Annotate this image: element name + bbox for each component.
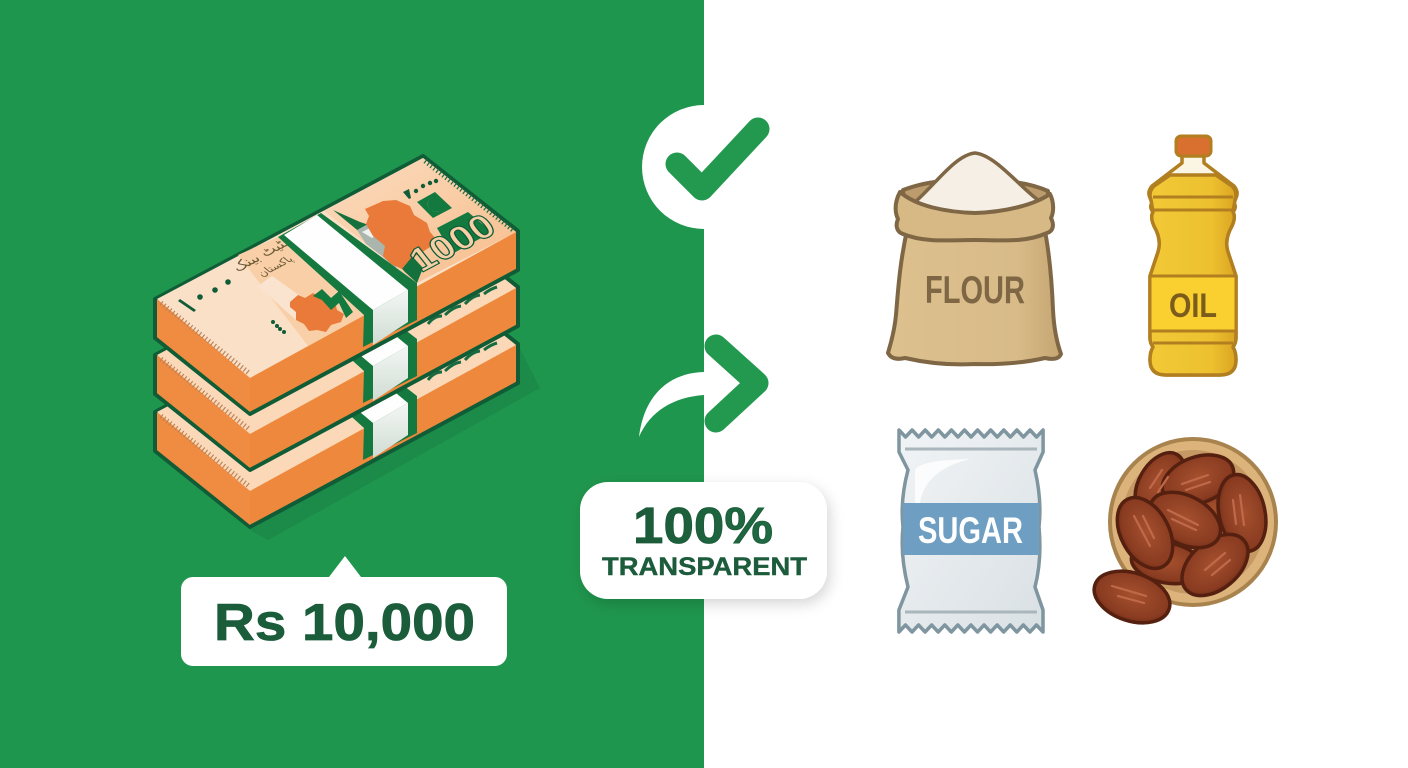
note face: right half: 1000: [401, 207, 503, 279]
banknote bundle: top: [155, 156, 518, 414]
icon: flour sack: [888, 153, 1061, 364]
sugar label: SUGAR: [918, 510, 1023, 551]
percent text: 100%: [633, 497, 773, 554]
note face: right half: [324, 158, 516, 283]
icon: check mark badge: [642, 105, 758, 229]
note face: left half: اسٹیٹ بینک: [227, 229, 304, 275]
note face: left half: [161, 229, 364, 373]
flour pile: [914, 153, 1038, 216]
icon: bowl of dates: [1087, 439, 1276, 632]
panel: green money side: [0, 0, 704, 768]
icon: oil bottle: [1149, 136, 1237, 375]
transparent text: TRANSPARENT: [602, 553, 807, 581]
banknote bundle: bottom: [155, 269, 518, 527]
oil label: OIL: [1169, 287, 1217, 325]
icon: sugar packet: [899, 430, 1043, 632]
panel: white groceries side: [704, 0, 1408, 768]
loose date: [1087, 562, 1177, 632]
banknote bundle: middle: [155, 212, 518, 470]
flour label: FLOUR: [925, 269, 1025, 312]
lower bundle edge swirls: [428, 287, 497, 380]
paper currency band: [278, 213, 417, 347]
amount text: Rs 10,000: [214, 594, 475, 652]
icon: curved arrow: [639, 346, 757, 437]
sugar band: [903, 503, 1039, 555]
callout: 100% transparent: [580, 482, 827, 599]
note face: left half: پاکستان: [254, 254, 296, 279]
callout: amount label: [181, 556, 507, 666]
illustration: stack of banknotes: [155, 156, 540, 540]
